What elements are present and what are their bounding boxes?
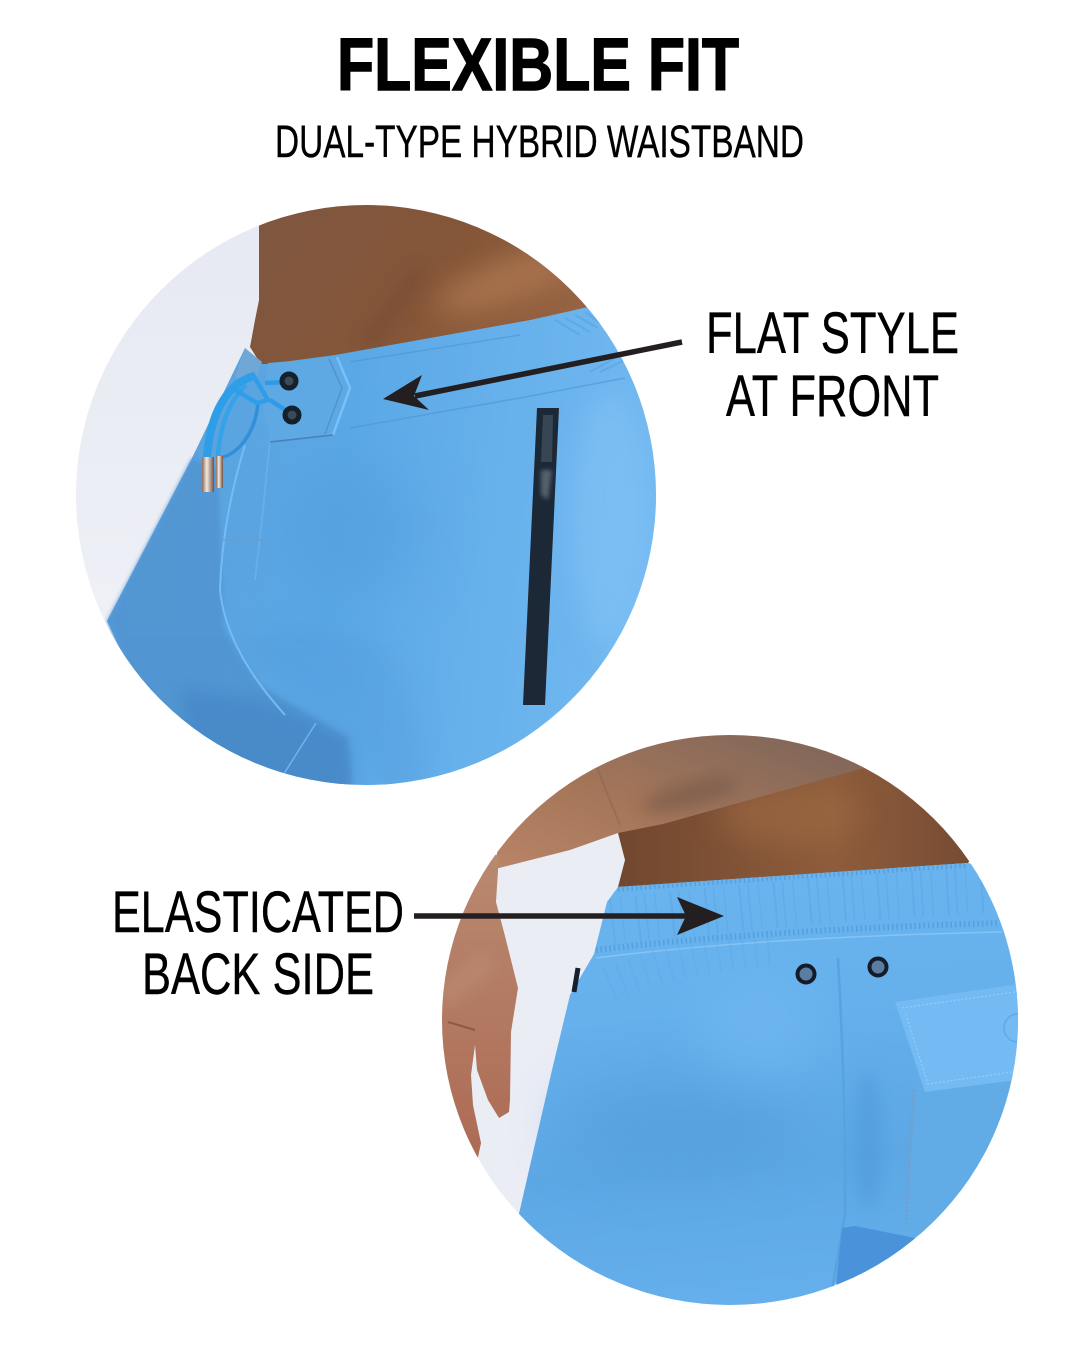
back skin	[618, 750, 970, 887]
torso skin	[250, 205, 588, 364]
back eyelets	[574, 958, 886, 992]
callout: elasticated back side: ELASTICATED	[112, 880, 404, 945]
callout: flat style at front: AT FRONT	[726, 364, 939, 429]
panel: front waistband photo circle	[70, 200, 670, 800]
callout: elasticated back side: BACK SIDE	[142, 942, 374, 1007]
drawcord and eyelets	[202, 374, 299, 492]
panel: back waistband photo circle	[442, 735, 1018, 1305]
shorts back	[500, 863, 1030, 1320]
hand	[436, 850, 518, 1162]
elasticated gathers	[596, 862, 1002, 959]
photo background	[76, 226, 259, 640]
title: FLEXIBLE FIT	[337, 23, 739, 106]
arrow: points to flat front waistband	[383, 342, 682, 410]
arrow: points to elasticated back	[414, 897, 724, 935]
back pocket flap	[895, 984, 1018, 1236]
shorts front	[107, 300, 670, 800]
photo background	[471, 833, 971, 1214]
front waistband flap	[235, 348, 350, 442]
forearm	[497, 735, 864, 868]
subtitle: DUAL-TYPE HYBRID WAISTBAND	[275, 116, 804, 167]
callout: flat style at front: FLAT STYLE	[706, 301, 959, 366]
icon: black waterproof zipper	[523, 408, 559, 705]
callout: elasticated back side	[112, 880, 404, 1007]
callout: flat style at front	[706, 301, 959, 429]
